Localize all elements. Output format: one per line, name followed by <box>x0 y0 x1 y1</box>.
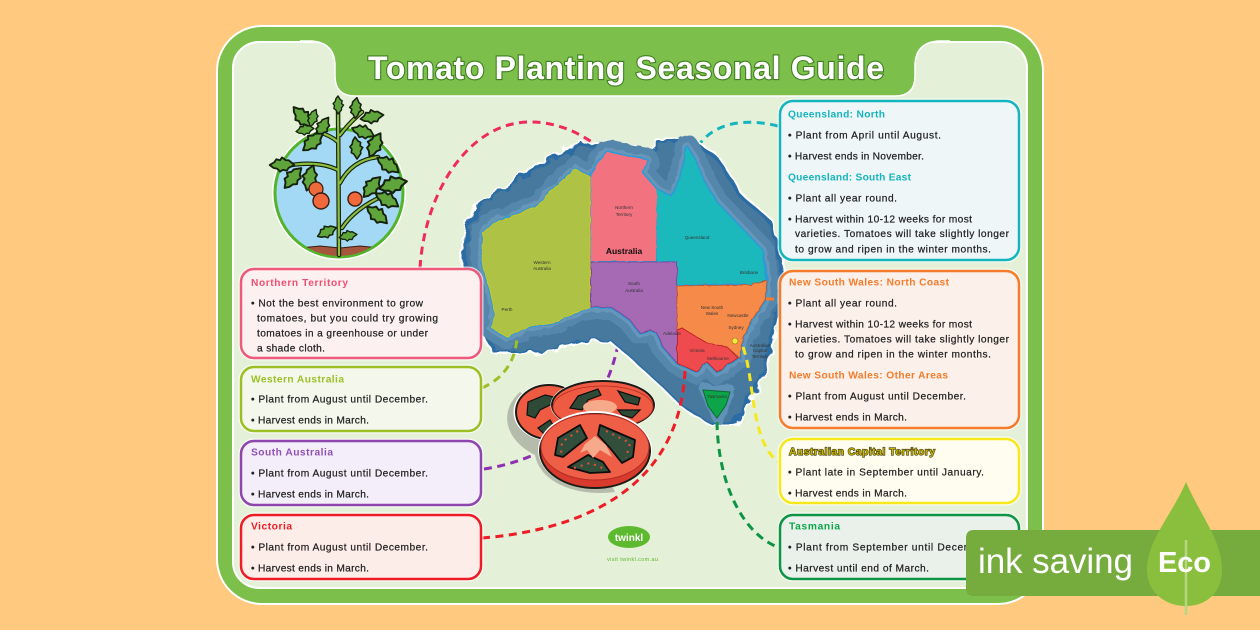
badge Eco: Eco <box>1158 547 1211 579</box>
panel: Northern Territory <box>241 269 481 358</box>
panel: Tasmania <box>780 515 1019 579</box>
seed chambers <box>555 425 635 473</box>
panel: New South Wales: • Plant from August until December. <box>788 392 966 402</box>
panel: Victoria: • Harvest ends in March. <box>251 564 369 574</box>
title tab <box>312 39 938 96</box>
panel: Victoria: Victoria <box>251 522 292 532</box>
twinkl logo: visit twinkl.com.au <box>607 557 658 563</box>
map labels: Adelaide <box>663 331 681 336</box>
map labels: Australia <box>625 288 643 293</box>
Western Australia <box>482 169 590 337</box>
map labels: Melbourne <box>707 356 729 361</box>
connector: Northern Territory <box>420 122 606 268</box>
panel: New South Wales: • Harvest ends in March. <box>788 412 907 424</box>
sea around coast <box>462 138 783 425</box>
New South Wales <box>677 280 767 358</box>
illustration: tomato plant <box>270 96 409 260</box>
map labels: Northern <box>615 205 633 210</box>
illustration: tomato slices <box>507 381 654 493</box>
twinkl logo: twinkl <box>615 533 643 544</box>
panel: Australian Capital Territory: Australian Capital Territory <box>789 447 935 458</box>
panel: Queensland: • Plant from April until August. <box>788 130 941 142</box>
panel: New South Wales: varieties. Tomatoes will take slightly longer <box>795 334 1010 346</box>
twinkl logo <box>607 526 658 563</box>
South Australia <box>591 262 677 363</box>
map of Australia <box>462 138 783 425</box>
panel: New South Wales: New South Wales: Other Areas <box>789 370 948 382</box>
Tasmania <box>703 390 730 418</box>
poster panel <box>233 42 1027 588</box>
panel: Queensland: Queensland: South East <box>788 172 912 184</box>
leaf vein <box>1185 540 1187 615</box>
connector: Australian Capital Territory <box>743 347 778 462</box>
connector: Victoria <box>482 370 685 538</box>
panel: South Australia <box>241 441 481 505</box>
map labels: Australia <box>606 246 642 256</box>
badge label: ink saving <box>978 542 1133 581</box>
panel: Queensland: • Plant all year round. <box>788 194 897 204</box>
panel: Queensland: • Harvest ends in November. <box>788 152 924 162</box>
Victoria <box>677 328 738 372</box>
panel: Queensland: Queensland: North <box>788 110 885 120</box>
map labels: Wales <box>706 311 719 316</box>
panel: Queensland: to grow and ripen in the winter months. <box>795 244 991 256</box>
map labels: Queensland <box>685 235 710 240</box>
panel: Australian Capital Territory: • Harvest ends in March. <box>788 488 907 500</box>
panel: Queensland: varieties. Tomatoes will take slightly longer <box>795 229 1010 240</box>
panel: Victoria <box>241 515 481 579</box>
poster <box>217 26 1043 604</box>
Northern Territory <box>591 152 657 261</box>
connector: Queensland <box>698 122 778 146</box>
map labels <box>502 205 771 399</box>
panel: Queensland <box>780 101 1019 260</box>
panel: Northern Territory: Northern Territory <box>251 278 348 289</box>
panel: Australian Capital Territory: • Plant late in September until January. <box>788 468 984 478</box>
panel: New South Wales: to grow and ripen in the winter months. <box>795 350 991 360</box>
panel: New South Wales: • Harvest within 10-12 weeks for most <box>788 320 972 330</box>
map labels: Newcastle <box>727 313 749 318</box>
panel: South Australia: • Plant from August until December. <box>251 468 428 480</box>
map labels: South <box>628 281 640 286</box>
panel: Northern Territory: • Not the best environment to grow <box>251 298 424 310</box>
badge: ink saving Eco <box>966 482 1260 615</box>
map labels: Brisbane <box>740 270 759 275</box>
map labels: Australian <box>750 343 771 348</box>
panel: Western Australia: • Plant from August until December. <box>251 394 428 406</box>
title tab edge <box>300 41 950 96</box>
map labels: New South <box>701 305 724 310</box>
panel: Western Australia: Western Australia <box>251 374 344 386</box>
panel: Northern Territory: tomatoes, but you could try growing <box>257 314 438 324</box>
panel: Northern Territory: a shade cloth. <box>257 344 325 354</box>
Australian Capital Territory <box>732 338 738 344</box>
map labels: Australia <box>533 266 551 271</box>
panel: New South Wales <box>780 271 1019 428</box>
panel: Tasmania: • Harvest until end of March. <box>788 564 929 574</box>
Queensland <box>657 147 765 285</box>
connector: Western Australia <box>482 338 517 388</box>
panel: Australian Capital Territory <box>780 439 1019 503</box>
map labels: Territory <box>752 354 769 359</box>
poster frame <box>217 26 1043 604</box>
panel: Tasmania: • Plant from September until December. <box>788 542 992 554</box>
map labels: Victoria <box>689 348 705 353</box>
connector: Tasmania <box>717 422 775 546</box>
panel: South Australia: South Australia <box>251 448 333 458</box>
icon: leaf <box>1147 482 1222 606</box>
panel: New South Wales: New South Wales: North Coast <box>789 278 950 288</box>
panel: Victoria: • Plant from August until December. <box>251 542 428 554</box>
map labels: Capital <box>753 348 767 353</box>
panel: Western Australia: • Harvest ends in March. <box>251 416 369 426</box>
panel: South Australia: • Harvest ends in March. <box>251 490 369 500</box>
panel: Queensland: • Harvest within 10-12 weeks for most <box>788 214 972 226</box>
title: Tomato Planting Seasonal Guide <box>368 50 884 86</box>
panel: Northern Territory: tomatoes in a greenhouse or under <box>257 328 429 340</box>
map labels: Sydney <box>728 325 744 330</box>
map labels: Tasmania <box>707 394 727 399</box>
panel: Tasmania: Tasmania <box>789 522 840 532</box>
panel: Western Australia <box>241 367 481 431</box>
connector: New South Wales <box>766 298 780 300</box>
badge bar <box>966 530 1260 596</box>
map labels: Territory <box>616 212 633 217</box>
map labels: Perth <box>502 307 513 312</box>
map labels: Western <box>533 260 551 265</box>
connector: South Australia <box>484 320 622 469</box>
panel: New South Wales: • Plant all year round. <box>788 298 897 310</box>
